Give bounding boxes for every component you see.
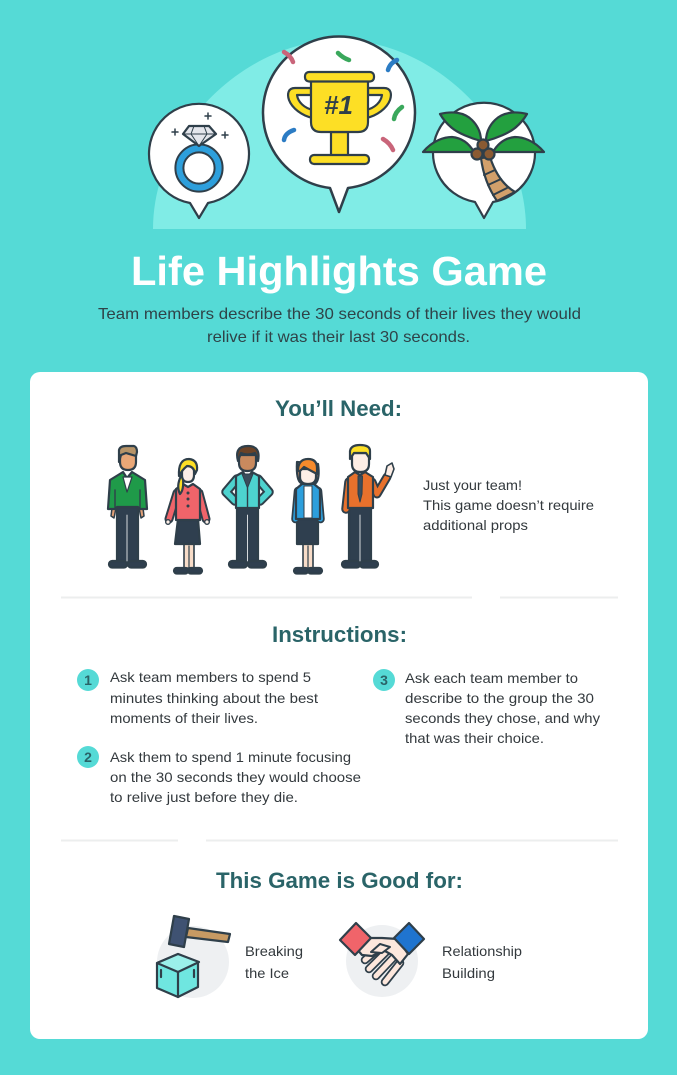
heading: good for: This Game is Good for:: [216, 868, 463, 893]
text: team note: [423, 477, 594, 533]
person: green sweater man: [108, 446, 147, 568]
text: breaking the ice: the Ice: [245, 965, 289, 981]
text: relationship building: Building: [442, 965, 495, 981]
step 1: [77, 669, 318, 726]
step 2: 2: [84, 749, 92, 765]
subtitle: Team members describe the 30 seconds of their lives they would: [98, 306, 581, 323]
title: Life Highlights Game: [131, 248, 547, 294]
fingers: [365, 948, 400, 982]
subtitle: [98, 306, 581, 346]
person: teal jacket man: [226, 446, 269, 568]
text: breaking the ice: [245, 943, 303, 981]
step 3: describe to the group the 30: [405, 690, 594, 706]
step 1: Ask team members to spend 5: [110, 669, 311, 685]
palm: [356, 938, 408, 964]
person: woman in blue jacket: [294, 459, 322, 574]
heading: instructions: Instructions:: [272, 622, 407, 647]
step 1: 1: [84, 672, 92, 688]
icon: ring speech bubble: [149, 104, 249, 218]
heading: you'll need: You’ll Need:: [275, 396, 402, 421]
text: relationship building: [442, 943, 522, 981]
subtitle: relive if it was their last 30 seconds.: [207, 329, 470, 346]
step 2: Ask them to spend 1 minute focusing: [110, 749, 351, 765]
icon: trophy speech bubble: [263, 37, 415, 212]
text: relationship building: Relationship: [442, 943, 522, 959]
text: breaking the ice: Breaking: [245, 943, 303, 959]
text: team note: This game doesn’t require: [423, 497, 594, 513]
illustration: team of five people: [108, 445, 394, 574]
step 2: on the 30 seconds they would choose: [110, 769, 361, 785]
step 3: that was their choice.: [405, 730, 544, 746]
step 2: to relive just before they die.: [110, 789, 298, 805]
trophy label: #1: [324, 90, 353, 120]
step 3: Ask each team member to: [405, 670, 578, 686]
step 3: 3: [380, 672, 388, 688]
step 2: [77, 746, 361, 805]
step 1: moments of their lives.: [110, 710, 258, 726]
text: team note: Just your team!: [423, 477, 522, 493]
icon: handshake: [340, 923, 424, 997]
panel: white card: [30, 372, 648, 1039]
step 1: minutes thinking about the best: [110, 690, 318, 706]
header illustration: light teal hill: [153, 40, 526, 229]
person: waving man in orange: [342, 445, 394, 568]
icon: hammer and ice cube: [157, 916, 230, 998]
text: team note: additional props: [423, 517, 528, 533]
person: woman in red top: [166, 459, 209, 574]
step 3: [373, 669, 600, 746]
confetti: [284, 52, 402, 150]
icon: palm tree speech bubble: [423, 103, 544, 218]
step 3: seconds they chose, and why: [405, 710, 600, 726]
